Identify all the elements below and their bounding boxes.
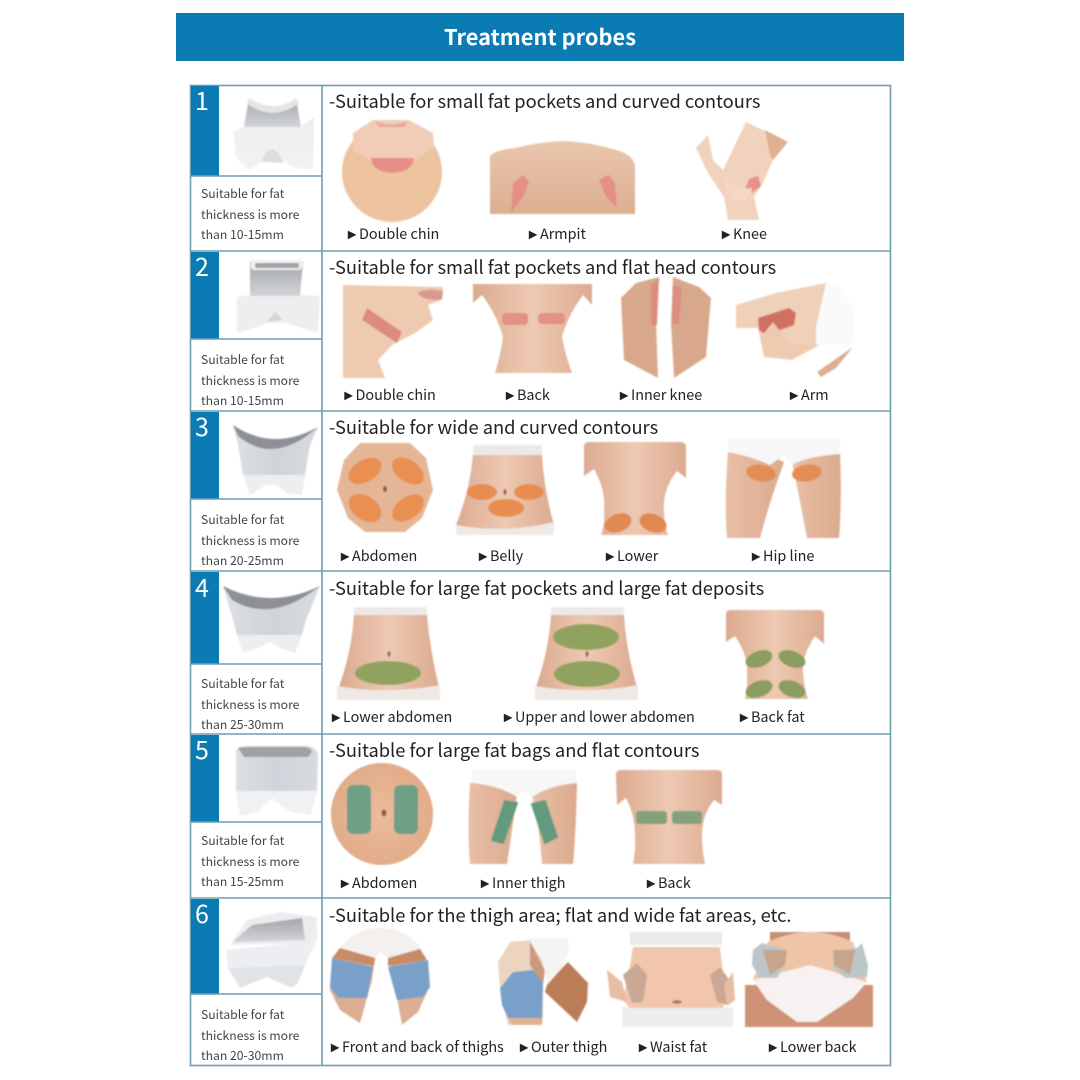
illustration: double chin side: [343, 285, 443, 378]
number badge 2: 2: [195, 248, 209, 284]
heading 4: -Suitable for large fat pockets and large fat deposits: [329, 575, 764, 601]
illustration: lower abdomen: [337, 607, 440, 700]
illustration: outer thigh: [498, 938, 588, 1025]
thickness note 6: [201, 1005, 300, 1064]
heading 5: -Suitable for large fat bags and flat contours: [329, 737, 699, 763]
label: hip line: ► Hip line: [749, 545, 814, 566]
icon: probe 4: [223, 586, 320, 653]
thickness note 5: Suitable for fat: [201, 831, 285, 849]
thickness note 4: Suitable for fat: [201, 674, 285, 692]
label: armpit: ► Armpit: [526, 223, 587, 244]
number badge 1: [191, 82, 219, 176]
thickness note 3: thickness is more: [201, 531, 300, 549]
label: belly: ► Belly: [476, 545, 524, 566]
label: knee: ► Knee: [719, 223, 767, 244]
illustration: arm: [736, 283, 854, 377]
number badge 4: 4: [195, 569, 209, 605]
thickness note 6: than 20-30mm: [201, 1046, 284, 1064]
illustration: front and back of thighs: [330, 928, 430, 1025]
thickness note 5: than 15-25mm: [201, 872, 284, 890]
number badge 3: [191, 408, 219, 499]
icon: probe 2: [237, 260, 320, 333]
number badge 5: 5: [195, 731, 209, 767]
thickness note 3: [201, 510, 300, 569]
label: inner thigh: ► Inner thigh: [478, 872, 566, 893]
illustration: abdomen 3: [337, 443, 433, 532]
illustration: knee: [696, 122, 788, 220]
panel: probe 2: [191, 248, 854, 409]
thickness note 3: Suitable for fat: [201, 510, 285, 528]
label: arm: ► Arm: [787, 384, 829, 405]
label: outer thigh: ► Outer thigh: [517, 1036, 607, 1057]
label: upper and lower abdomen: ► Upper and lower abdomen: [501, 706, 695, 727]
thickness note 2: than 10-15mm: [201, 391, 284, 409]
illustration: lower back: [745, 932, 873, 1027]
icon: probe 5: [236, 746, 318, 816]
heading 3: -Suitable for wide and curved contours: [329, 414, 658, 440]
number badge 5: [191, 731, 219, 822]
illustration: armpit: [490, 141, 635, 214]
panel: probe 4: [191, 569, 824, 733]
panel: probe 3: [191, 408, 841, 569]
illustration: abdomen 5: [331, 763, 433, 865]
illustration: inner knee: [621, 277, 711, 378]
label: abdomen 3: ► Abdomen: [338, 545, 417, 566]
thickness note 3: than 20-25mm: [201, 551, 284, 569]
table frame: [190, 85, 891, 1066]
panel: probe 5: [191, 731, 722, 893]
illustration: back fat: [726, 610, 824, 701]
illustration: lower back: [584, 442, 686, 536]
label: double chin 2: ► Double chin: [342, 384, 436, 405]
thickness note 4: [201, 674, 300, 733]
number badge 6: [191, 895, 219, 994]
label: lower abdomen: ► Lower abdomen: [329, 706, 452, 727]
illustration: belly: [456, 445, 554, 535]
thickness note 2: Suitable for fat: [201, 350, 285, 368]
title banner: [176, 13, 904, 61]
label: back 2: ► Back: [503, 384, 550, 405]
thickness note 5: [201, 831, 300, 890]
label: inner knee: ► Inner knee: [617, 384, 702, 405]
thickness note 1: [201, 184, 300, 243]
label: waist fat: ► Waist fat: [636, 1036, 708, 1057]
panel: probe 1: [191, 82, 788, 244]
thickness note 6: thickness is more: [201, 1026, 300, 1044]
number badge 1: 1: [195, 82, 209, 118]
panel: probe 6: [191, 895, 873, 1064]
thickness note 2: thickness is more: [201, 371, 300, 389]
heading 2: -Suitable for small fat pockets and flat head contours: [329, 254, 776, 280]
title banner: Treatment probes: [444, 21, 636, 52]
label: front and back of thighs: ► Front and back of thighs: [328, 1036, 504, 1057]
icon: probe 3: [233, 425, 318, 495]
thickness note 2: [201, 350, 300, 409]
thickness note 1: thickness is more: [201, 205, 300, 223]
illustration: hip line: [726, 438, 841, 538]
heading 1: -Suitable for small fat pockets and curved contours: [329, 88, 760, 114]
number badge 6: 6: [195, 895, 209, 931]
illustration: double chin: [342, 120, 442, 222]
number badge 2: [191, 248, 219, 339]
number badge 3: 3: [195, 408, 209, 444]
thickness note 1: Suitable for fat: [201, 184, 285, 202]
label: back fat: ► Back fat: [737, 706, 805, 727]
label: lower: ► Lower: [603, 545, 659, 566]
illustration: waist fat: [607, 932, 735, 1027]
thickness note 4: thickness is more: [201, 695, 300, 713]
label: lower back: ► Lower back: [766, 1036, 857, 1057]
thickness note 4: than 25-30mm: [201, 715, 284, 733]
illustration: back 5: [616, 770, 722, 864]
thickness note 6: Suitable for fat: [201, 1005, 285, 1023]
illustration: back 2: [473, 284, 592, 373]
icon: probe 1: [233, 98, 314, 170]
thickness note 1: than 10-15mm: [201, 225, 284, 243]
heading 6: -Suitable for the thigh area; flat and wide fat areas, etc.: [329, 902, 792, 928]
label: double chin: ► Double chin: [345, 223, 439, 244]
illustration: inner thigh: [468, 770, 577, 864]
label: abdomen 5: ► Abdomen: [338, 872, 417, 893]
label: back 5: ► Back: [644, 872, 691, 893]
illustration: upper and lower abdomen: [535, 607, 638, 700]
thickness note 5: thickness is more: [201, 852, 300, 870]
number badge 4: [191, 569, 219, 664]
icon: probe 6: [226, 912, 317, 988]
